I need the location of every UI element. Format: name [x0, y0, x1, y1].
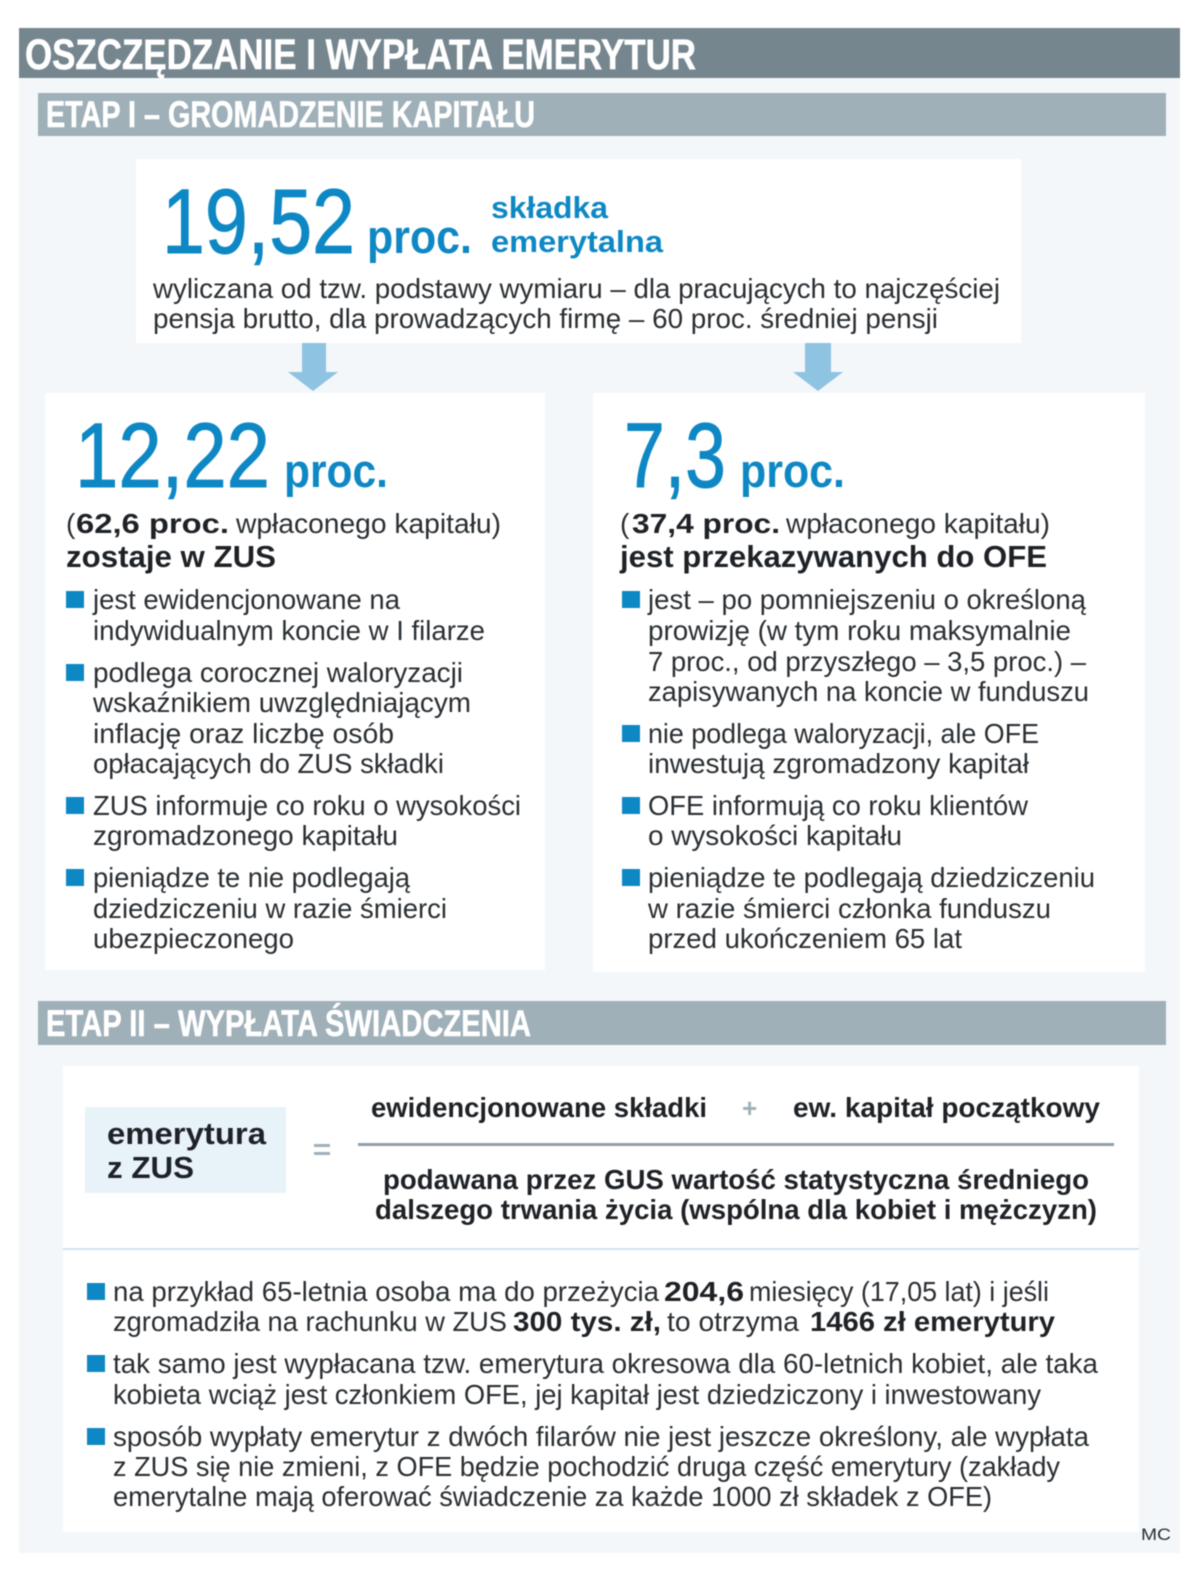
heading: stage I — [38, 93, 1166, 136]
notes: z ZUS się nie zmieni, z OFE będzie pochodzić druga część emerytury (zakłady — [113, 1451, 1060, 1482]
panel: ZUS share: ZUS informuje co roku o wysokości — [93, 790, 521, 821]
panel: OFE share: proc. — [740, 444, 845, 497]
notes: miesięcy (17,05 lat) i jeśli — [749, 1276, 1049, 1307]
panel: total contribution: 19,52 — [162, 171, 355, 273]
panel: total contribution: wyliczana od tzw. podstawy wymiaru – dla pracujących to najczęściej — [152, 273, 1000, 304]
panel: total contribution: proc. — [367, 210, 472, 263]
heading: stage II: ETAP II – WYPŁATA ŚWIADCZENIA — [46, 1002, 531, 1044]
panel: OFE share: o wysokości kapitału — [648, 820, 902, 851]
notes: na przykład 65-letnia osoba ma do przeżycia — [113, 1276, 659, 1307]
panel: ZUS share: pieniądze te nie podlegają — [93, 862, 410, 893]
formula: emerytura — [107, 1116, 267, 1151]
title — [19, 28, 1180, 79]
panel: ZUS share: ( — [66, 508, 76, 539]
panel: OFE share: nie podlega waloryzacji, ale OFE — [648, 718, 1039, 749]
arrow: to ZUS — [288, 343, 338, 391]
notes: emerytalne mają oferować świadczenie za każde 1000 zł składek z OFE) — [113, 1481, 992, 1512]
formula: dalszego trwania życia (wspólna dla kobiet i mężczyzn) — [375, 1194, 1097, 1225]
panel: OFE share: wpłaconego kapitału) — [785, 508, 1050, 539]
notes: 300 tys. zł, — [513, 1306, 661, 1337]
panel: OFE share: przed ukończeniem 65 lat — [648, 923, 962, 954]
panel: OFE share — [593, 393, 1145, 972]
panel: total contribution: emerytalna — [491, 224, 664, 259]
panel: OFE share: OFE informują co roku klientów — [648, 790, 1029, 821]
panel: OFE share: jest – po pomniejszeniu o określoną — [647, 584, 1086, 615]
notes — [87, 1276, 1098, 1512]
notes: kobieta wciąż jest członkiem OFE, jej kapitał jest dziedziczony i inwestowany — [113, 1379, 1041, 1410]
panel: OFE share: 37,4 proc. — [632, 508, 780, 539]
panel: ZUS share: proc. — [284, 444, 388, 497]
panel: total contribution — [136, 159, 1021, 343]
panel: total contribution: pensja brutto, dla prowadzących firmę – 60 proc. średniej pensji — [153, 303, 938, 334]
panel: ZUS share — [45, 393, 545, 970]
formula: podawana przez GUS wartość statystyczna średniego — [383, 1164, 1089, 1195]
panel: ZUS share: 62,6 proc. — [76, 508, 229, 539]
panel: ZUS share: 12,22 — [75, 405, 270, 507]
panel: ZUS share: podlega corocznej waloryzacji — [93, 657, 463, 688]
panel: OFE share: pieniądze te podlegają dziedziczeniu — [648, 862, 1095, 893]
panel: ZUS share: indywidualnym koncie w I filarze — [93, 615, 485, 646]
formula: ew. kapitał początkowy — [793, 1092, 1100, 1123]
panel: ZUS share: wpłaconego kapitału) — [235, 508, 501, 539]
panel: OFE share: w razie śmierci członka funduszu — [647, 893, 1051, 924]
notes: to otrzyma — [667, 1306, 799, 1337]
panel: ZUS share: wskaźnikiem uwzględniającym — [92, 687, 471, 718]
panel: ZUS share: ubezpieczonego — [93, 923, 294, 954]
formula: z ZUS — [107, 1150, 194, 1185]
notes: 204,6 — [664, 1276, 744, 1307]
panel: OFE share: prowizję (w tym roku maksymalnie — [648, 615, 1071, 646]
panel: ZUS share: inflację oraz liczbę osób — [93, 718, 394, 749]
panel: payout — [63, 1066, 1139, 1532]
panel: OFE share: ( — [620, 508, 630, 539]
panel: OFE share: jest przekazywanych do OFE — [619, 539, 1047, 574]
panel: OFE share: 7,3 — [624, 405, 726, 507]
notes: 1466 zł emerytury — [810, 1306, 1055, 1337]
panel: ZUS share: zgromadzonego kapitału — [93, 820, 398, 851]
formula — [85, 1092, 1114, 1225]
notes: tak samo jest wypłacana tzw. emerytura okresowa dla 60-letnich kobiet, ale taka — [113, 1348, 1098, 1379]
panel: OFE share: zapisywanych na koncie w funduszu — [648, 676, 1089, 707]
panel: total contribution: składka — [491, 190, 609, 225]
title: OSZCZĘDZANIE I WYPŁATA EMERYTUR — [25, 31, 696, 79]
panel: ZUS share: opłacających do ZUS składki — [93, 748, 444, 779]
panel: OFE share: 7 proc., od przyszłego – 3,5 proc.) – — [648, 646, 1086, 677]
notes: sposób wypłaty emerytur z dwóch filarów nie jest jeszcze określony, ale wypłata — [113, 1421, 1089, 1452]
arrow: to OFE — [793, 343, 843, 391]
panel: ZUS share: dziedziczeniu w razie śmierci — [93, 893, 447, 924]
panel: OFE share: inwestują zgromadzony kapitał — [648, 748, 1030, 779]
heading: stage II — [38, 1001, 1166, 1045]
notes: zgromadziła na rachunku w ZUS — [113, 1306, 507, 1337]
formula: ewidencjonowane składki — [371, 1092, 707, 1123]
heading: stage I: ETAP I – GROMADZENIE KAPITAŁU — [46, 94, 535, 135]
panel: ZUS share: zostaje w ZUS — [66, 539, 276, 574]
panel: ZUS share: jest ewidencjonowane na — [92, 584, 400, 615]
formula: + — [742, 1093, 757, 1123]
credit: MC — [1141, 1525, 1171, 1544]
